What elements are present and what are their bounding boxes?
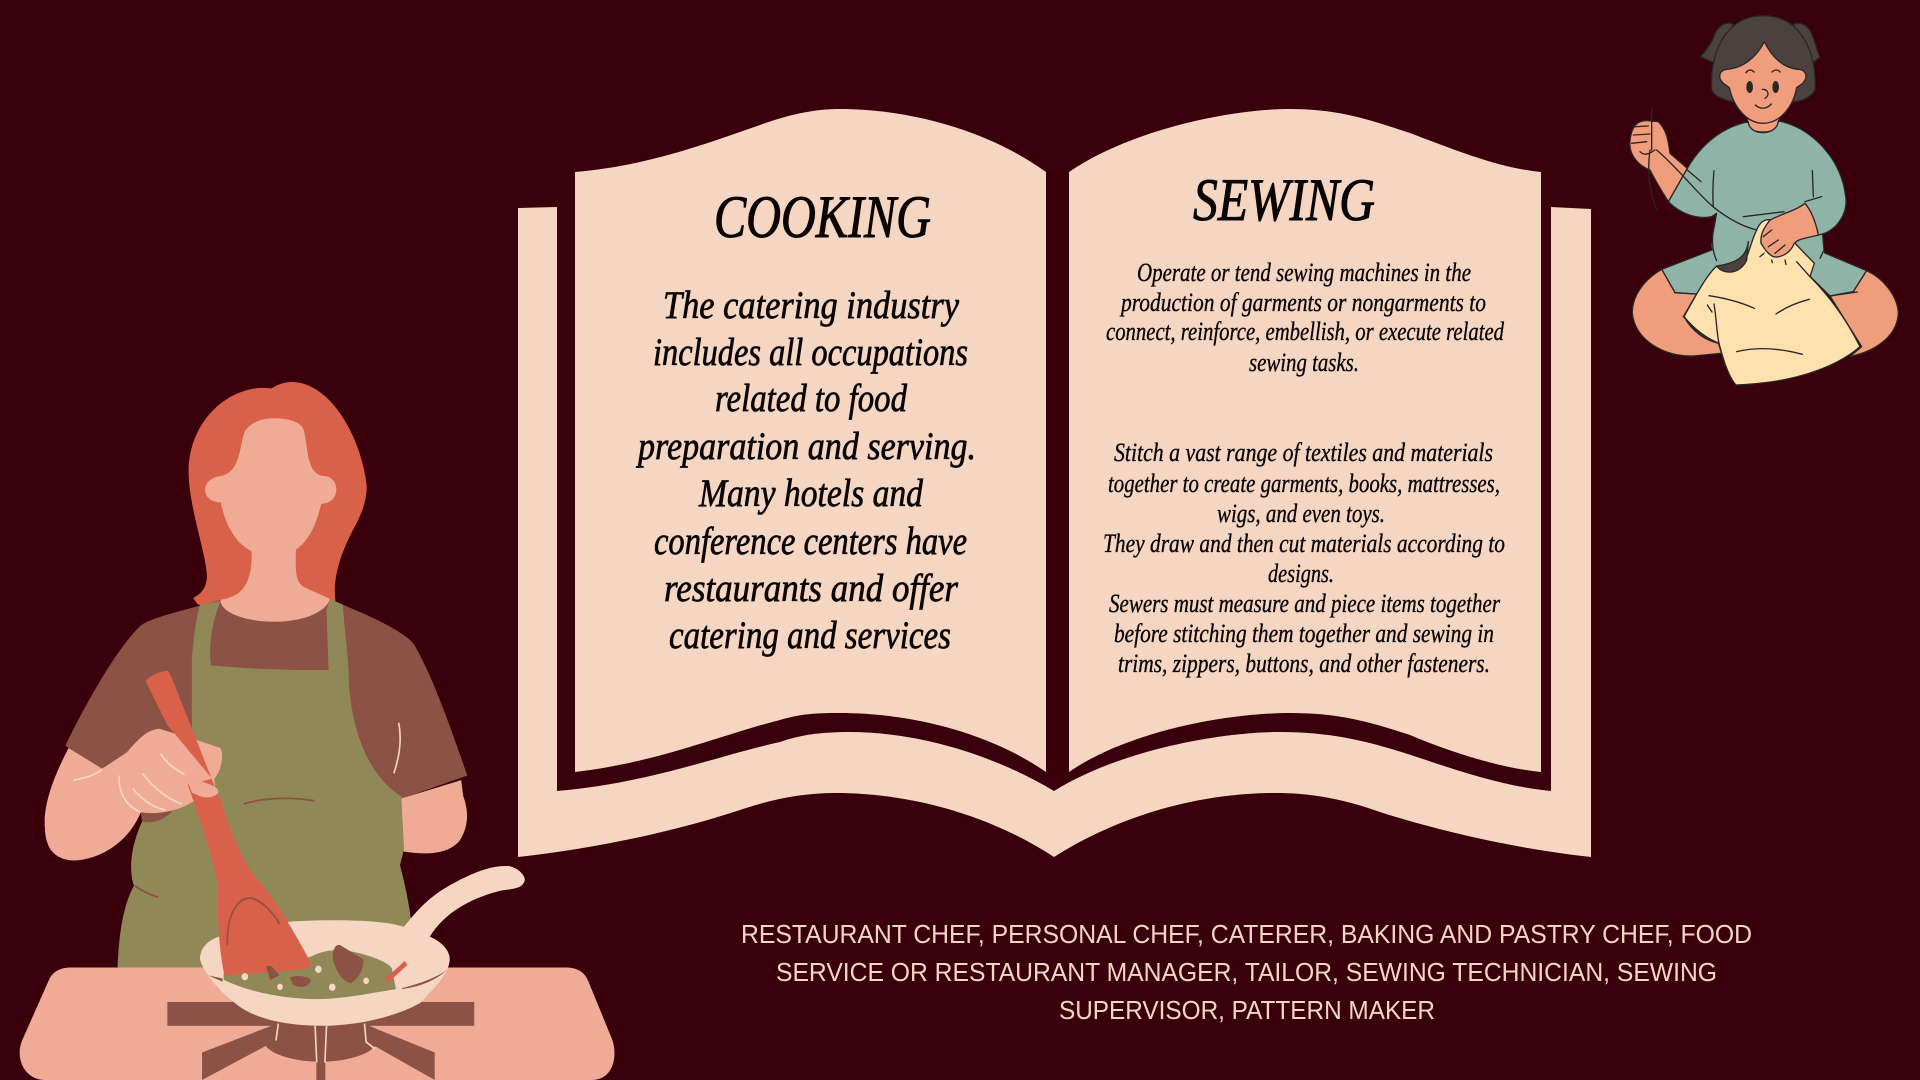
- sewing description: second paragraph: wigs, and even toys.: [1217, 499, 1385, 528]
- chilli piece: [387, 963, 406, 981]
- icon: chef cooking: [20, 382, 615, 1080]
- cooking description: Many hotels and: [698, 472, 923, 515]
- occupations list: RESTAURANT CHEF, PERSONAL CHEF, CATERER, BAKING AND PASTRY CHEF, FOOD: [741, 919, 1752, 949]
- spatula arc: [227, 898, 280, 945]
- near arm and hand: [45, 729, 222, 861]
- sweater fill: [1668, 121, 1846, 267]
- face: [1720, 42, 1806, 123]
- finger over spatula: [189, 782, 218, 797]
- food in pan: [224, 950, 396, 999]
- cloth: [1684, 220, 1860, 385]
- nose, mouth and brows: [1746, 70, 1780, 108]
- finger: [188, 782, 218, 797]
- legs: [1632, 269, 1722, 356]
- cooking description: catering and services: [669, 614, 951, 657]
- sewing description: first paragraph: production of garments or nongarments to: [1119, 288, 1486, 317]
- hair: [1712, 16, 1815, 102]
- neck: [1747, 113, 1780, 132]
- cooking description: includes all occupations: [653, 331, 968, 374]
- sewing description: first paragraph: connect, reinforce, embellish, or execute related: [1106, 317, 1505, 346]
- eyes: [1746, 81, 1779, 93]
- hair: [189, 382, 367, 605]
- face and neck: [205, 418, 336, 622]
- sewing description: second paragraph: They draw and then cut materials according to: [1103, 529, 1505, 558]
- sleeve shadow: [141, 810, 173, 822]
- cooking description: related to food: [715, 377, 907, 420]
- sewing description: first paragraph: [1106, 258, 1505, 377]
- occupations list: SERVICE OR RESTAURANT MANAGER, TAILOR, SEWING TECHNICIAN, SEWING: [776, 957, 1717, 987]
- sewing description: second paragraph: Sewers must measure and piece items together: [1109, 589, 1501, 618]
- rice grains: [242, 966, 369, 991]
- cooking description: [635, 284, 976, 657]
- cooking description: conference centers have: [654, 520, 967, 563]
- book cover: [518, 207, 1591, 857]
- heading: sewing: SEWING: [1193, 167, 1375, 233]
- occupations list: SUPERVISOR, PATTERN MAKER: [1059, 995, 1435, 1025]
- far arm: [401, 780, 467, 853]
- stove burner: [167, 1002, 474, 1080]
- shorts: [1662, 249, 1867, 296]
- sewing description: first paragraph: sewing tasks.: [1249, 348, 1359, 377]
- sewing description: second paragraph: [1103, 438, 1505, 678]
- clothing and hand creases: [73, 723, 400, 897]
- sewing description: second paragraph: designs.: [1268, 559, 1334, 588]
- apron: [118, 599, 412, 971]
- occupations list: [741, 919, 1752, 1025]
- icon: girl sewing: [1630, 16, 1898, 385]
- sewing description: second paragraph: trims, zippers, buttons, and other fasteners.: [1118, 649, 1490, 678]
- raised arm and hand: [1630, 121, 1687, 202]
- burner highlights: [276, 1024, 375, 1063]
- meat pieces: [208, 945, 447, 989]
- pan handle: [402, 866, 525, 939]
- pigtails: [1701, 23, 1820, 63]
- table: [20, 967, 615, 1080]
- spatula head: [188, 785, 311, 975]
- wooden spoon handle: [146, 671, 220, 801]
- cooking description: preparation and serving.: [635, 425, 976, 468]
- open book: [518, 109, 1591, 857]
- sewing description: second paragraph: Stitch a vast range of textiles and materials: [1114, 438, 1493, 467]
- shirt: [65, 599, 467, 799]
- needle, thread, and detail lines: [1632, 108, 1857, 354]
- right page: [1069, 109, 1541, 772]
- left page: [575, 109, 1046, 772]
- right leg: [1830, 271, 1898, 357]
- cooking description: restaurants and offer: [664, 567, 959, 610]
- sweater outline: [1668, 121, 1846, 261]
- hand on cloth: [1761, 203, 1818, 257]
- sewing description: first paragraph: Operate or tend sewing machines in the: [1137, 258, 1471, 287]
- pan: [200, 920, 450, 1026]
- sewing description: second paragraph: before stitching them together and sewing in: [1114, 619, 1494, 648]
- cloth dark lining: [1684, 242, 1748, 343]
- heading: cooking: COOKING: [714, 184, 931, 250]
- sewing description: second paragraph: together to create garments, books, mattresses,: [1108, 469, 1500, 498]
- cooking description: The catering industry: [663, 284, 960, 327]
